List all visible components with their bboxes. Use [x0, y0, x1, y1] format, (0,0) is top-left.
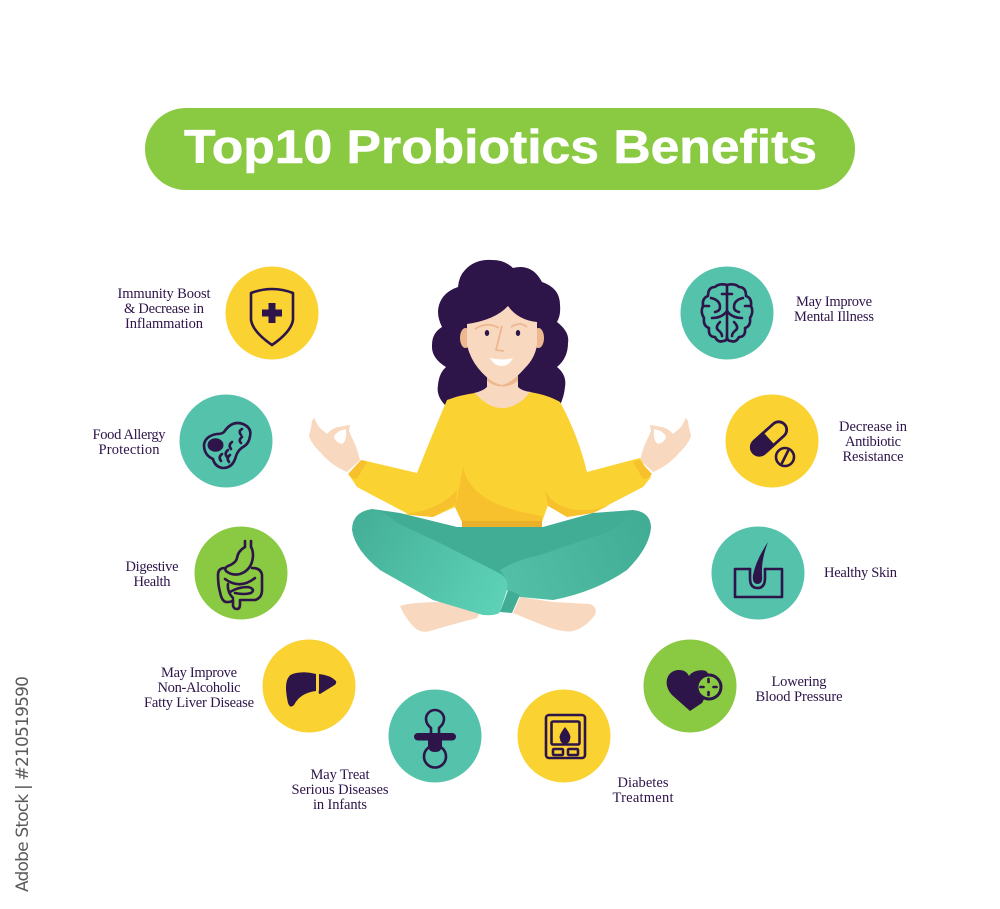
label: Lowering	[772, 674, 826, 690]
label: May Treat	[310, 767, 370, 783]
face	[467, 306, 537, 385]
circle with pill icon	[726, 394, 818, 488]
benefit: mental illness	[680, 266, 874, 360]
benefit: blood pressure	[644, 640, 842, 732]
hips	[372, 509, 638, 585]
benefit: infants	[292, 690, 482, 813]
circle with hair follicle icon	[712, 526, 804, 620]
label: Healthy Skin	[824, 565, 898, 581]
benefit: skin	[712, 526, 898, 620]
benefit: digestive	[126, 526, 288, 620]
stock image id: Adobe Stock | #210519590	[13, 676, 33, 892]
chin shadow	[487, 375, 518, 386]
right hand	[640, 418, 691, 472]
label: Treatment	[612, 790, 674, 806]
label: Resistance	[842, 449, 904, 465]
hair	[432, 260, 568, 405]
benefit: immunity	[118, 266, 318, 360]
title banner: Top10 Probiotics Benefits	[184, 120, 817, 173]
sweater shading	[348, 460, 652, 522]
sweater	[349, 392, 651, 522]
circle with peanut icon	[180, 394, 272, 488]
label: Digestive	[126, 559, 178, 575]
trouser cuff	[500, 590, 520, 613]
circle with glucose meter icon	[518, 690, 610, 782]
right-side leg	[500, 510, 651, 600]
circle with shield icon	[226, 266, 318, 360]
label: Protection	[98, 442, 160, 458]
circle with brain icon	[680, 266, 774, 360]
label: Blood Pressure	[756, 689, 842, 705]
label: Mental Illness	[794, 309, 874, 325]
label: Immunity Boost	[118, 286, 210, 302]
ears	[460, 328, 544, 348]
circle with pacifier icon	[388, 690, 482, 782]
label: Antibiotic	[845, 434, 901, 450]
circle with heart and gauge icon	[644, 640, 736, 732]
label: May Improve	[796, 294, 872, 310]
benefit: liver	[144, 640, 356, 732]
label: Decrease in	[839, 419, 908, 435]
label: Food Allergy	[92, 427, 166, 443]
smile	[490, 358, 513, 366]
neck	[474, 370, 531, 408]
label: & Decrease in	[124, 301, 205, 317]
label: Non-Alcoholic	[158, 680, 240, 696]
label: Fatty Liver Disease	[144, 695, 254, 711]
label: Serious Diseases	[292, 782, 389, 798]
eyes	[485, 330, 520, 336]
benefit: food allergy	[92, 394, 272, 488]
benefit: diabetes	[518, 690, 674, 806]
label: Inflammation	[125, 316, 204, 332]
label: in Infants	[313, 797, 367, 813]
circle with digestive tract icon	[194, 526, 288, 620]
benefit: antibiotic	[726, 394, 908, 488]
label: Diabetes	[618, 775, 669, 791]
woman meditating illustration	[309, 260, 691, 632]
title banner	[145, 108, 855, 190]
front leg	[352, 509, 508, 615]
label: May Improve	[161, 665, 237, 681]
circle with liver icon	[262, 640, 356, 732]
label: Health	[134, 574, 171, 590]
waistband	[462, 521, 542, 529]
eyebrows and nose	[475, 324, 527, 351]
feet	[400, 597, 596, 632]
left hand	[309, 418, 360, 472]
